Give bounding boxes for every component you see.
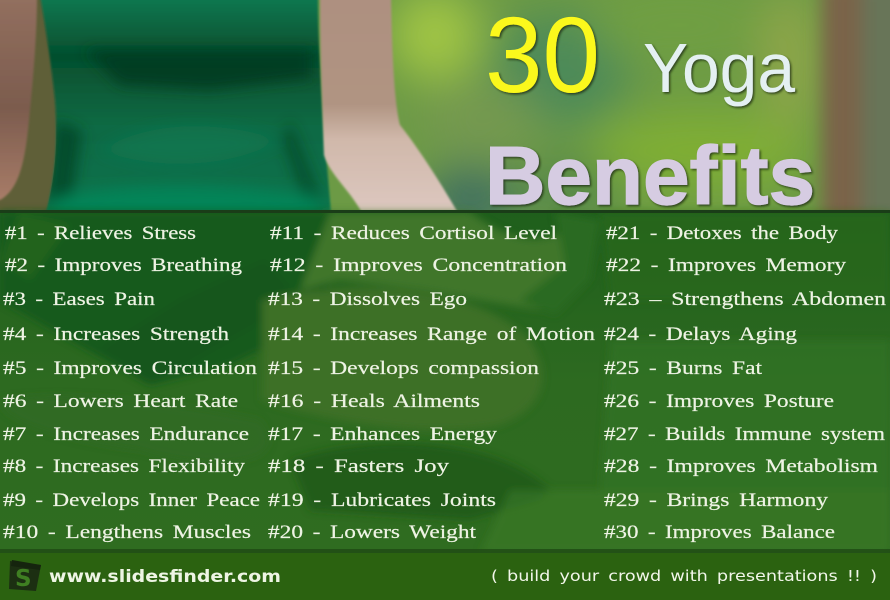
title word Yoga: Yoga <box>643 29 795 107</box>
photo background <box>0 0 890 210</box>
benefits column 3 <box>604 224 886 543</box>
icon: slidesfinder logo <box>9 560 41 592</box>
benefits column 3: #26 - Improves Posture <box>604 392 834 412</box>
benefits column 3: #22 - Improves Memory <box>606 256 847 276</box>
benefits column 3: #29 - Brings Harmony <box>604 491 829 511</box>
benefits column 3: #28 - Improves Metabolism <box>604 457 879 477</box>
benefits column 1: #7 - Increases Endurance <box>3 425 249 445</box>
footer tagline: ( build your crowd with presentations !! ) <box>491 567 877 585</box>
benefits column 1: #4 - Increases Strength <box>3 325 229 345</box>
benefits column 1: #5 - Improves Circulation <box>3 359 257 379</box>
benefits column 3: #27 - Builds Immune system <box>604 425 886 445</box>
benefits column 2: #11 - Reduces Cortisol Level <box>270 224 557 244</box>
benefits column 3: #25 - Burns Fat <box>604 359 763 379</box>
footer website url: www.slidesfinder.com <box>49 567 281 586</box>
benefits column 1: #8 - Increases Flexibility <box>3 457 246 477</box>
icon: slidesfinder logo: S <box>15 566 32 592</box>
benefits column 1: #1 - Relieves Stress <box>5 224 196 244</box>
benefits column 3: #23 – Strengthens Abdomen <box>604 290 886 310</box>
benefits column 3: #21 - Detoxes the Body <box>606 224 839 244</box>
benefits column 1: #3 - Eases Pain <box>3 290 155 310</box>
benefits column 1: #9 - Develops Inner Peace <box>3 491 260 511</box>
photo shapes under panel <box>0 212 890 553</box>
woman in green top <box>0 0 458 216</box>
benefits column 3: #30 - Improves Balance <box>604 523 835 543</box>
benefits column 2: #18 - Fasters Joy <box>268 457 450 477</box>
left arm <box>0 0 37 200</box>
translucent green panel <box>0 210 890 553</box>
benefits column 3: #24 - Delays Aging <box>604 325 797 345</box>
benefits column 2: #15 - Develops compassion <box>268 359 539 379</box>
benefits column 2: #16 - Heals Ailments <box>268 392 480 412</box>
benefits column 2: #14 - Increases Range of Motion <box>268 325 595 345</box>
benefits column 2 <box>268 224 595 543</box>
benefits column 1 <box>3 224 260 543</box>
benefits column 2: #19 - Lubricates Joints <box>268 491 496 511</box>
benefits column 2: #20 - Lowers Weight <box>268 523 477 543</box>
title word Benefits: Benefits <box>485 129 815 222</box>
footer bar <box>0 553 890 600</box>
benefits column 1: #6 - Lowers Heart Rate <box>3 392 238 412</box>
green top <box>40 0 331 213</box>
benefits column 2: #12 - Improves Concentration <box>270 256 567 276</box>
right arm <box>320 0 458 213</box>
benefits column 2: #13 - Dissolves Ego <box>268 290 467 310</box>
benefits column 1: #2 - Improves Breathing <box>5 256 242 276</box>
benefits column 1: #10 - Lengthens Muscles <box>3 523 251 543</box>
benefits column 2: #17 - Enhances Energy <box>268 425 498 445</box>
